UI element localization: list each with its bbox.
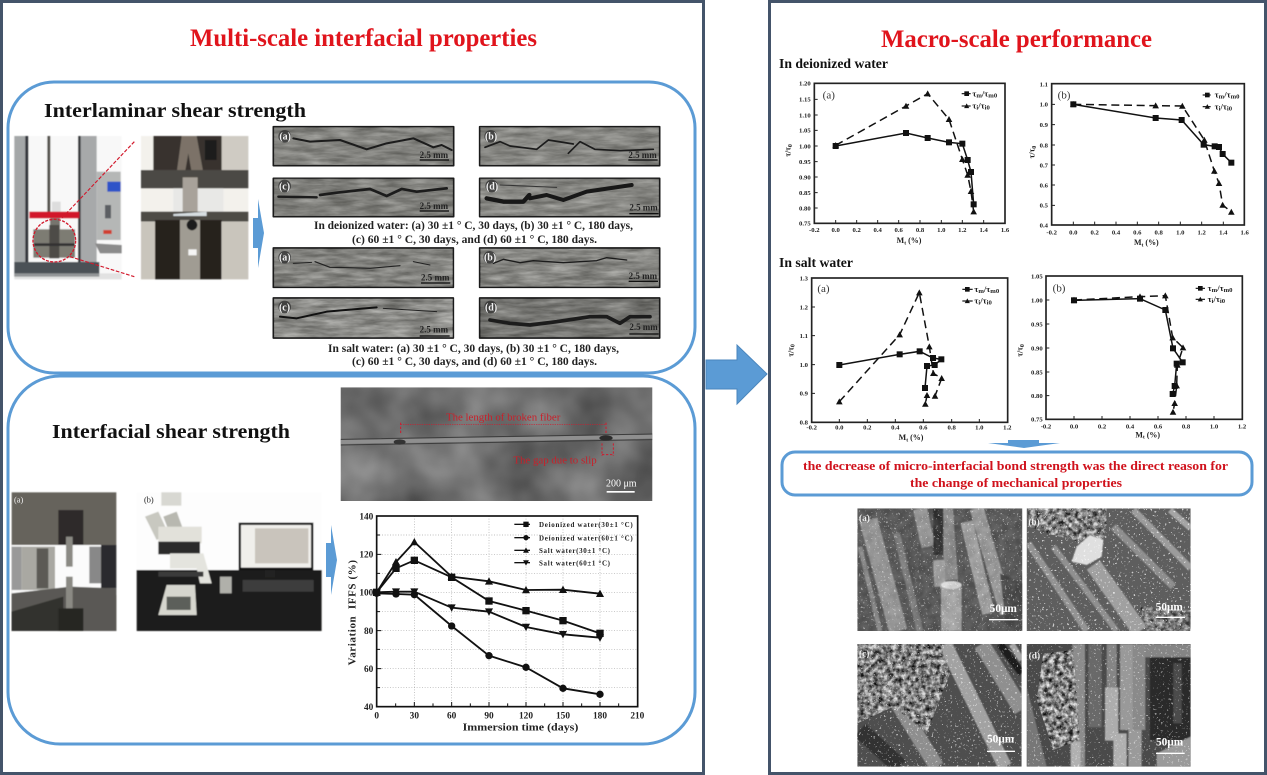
line chart: deionized (b): 0.4 (1112, 229, 1121, 236)
line chart: deionized (b): 0.8 (1040, 142, 1049, 149)
line chart: deionized (a): 0.0 (832, 227, 840, 234)
panel: macro-scale performance (770, 2, 1266, 774)
line chart: deionized (b): τ (1215, 101, 1219, 111)
line chart: deionized (a): 1.10 (799, 112, 811, 119)
line chart: deionized (b): 1.0 (1040, 102, 1049, 109)
panel: interfacial shear strength (8, 376, 695, 744)
heading: in salt water: In salt water (779, 255, 853, 270)
line chart: salt (a) (786, 276, 1012, 443)
SEM image (a) (857, 508, 1022, 631)
axis labels: 150 (556, 712, 570, 722)
line chart: deionized (b): m (1219, 94, 1225, 101)
line chart: deionized (a): 0.85 (799, 190, 811, 197)
axis labels: Variation IFFS (%) (346, 560, 358, 665)
line chart: salt (b): i0 (1220, 298, 1226, 305)
photo: (a) fibre test fixture and (b) microscope: (a) (14, 496, 23, 505)
line chart: deionized (a): 1.4 (980, 227, 988, 234)
title: macro-scale: Macro-scale performance (881, 26, 1152, 53)
line chart: salt (b): t (1143, 435, 1145, 441)
line chart: salt (b): 0.75 (1031, 417, 1043, 424)
legend: Salt water(60±1 °C) (539, 559, 611, 567)
line chart: salt (a): τ/τ (786, 347, 795, 357)
line chart: salt (b): τ/τ (1016, 347, 1025, 357)
line chart: salt (b): 0.90 (1031, 345, 1043, 352)
line chart: salt (b): τ (1208, 283, 1212, 293)
line chart: deionized (a): τ (972, 88, 976, 98)
legend: Salt water(30±1 °C) (539, 547, 611, 555)
line chart: salt (b): m (1212, 287, 1218, 294)
line chart: salt (b): /τ (1216, 283, 1224, 293)
crack image: salt (d) (480, 298, 660, 338)
line chart: salt (a): M (899, 433, 906, 442)
line chart: deionized (b): 0 (1032, 146, 1038, 149)
line chart: salt (b): 0.2 (1098, 423, 1107, 430)
line chart: deionized (a): -0.2 (809, 227, 820, 234)
crack image: deionized (b) (480, 127, 660, 166)
crack image: deionized (b): 2.5 mm (628, 150, 657, 160)
line chart: deionized (a): (%) (906, 236, 922, 245)
micrograph: broken fiber: The gap due to slip (513, 454, 597, 466)
line chart: deionized (a): τ/τ (784, 147, 793, 157)
axis labels: 30 (410, 712, 419, 722)
axis labels: 210 (630, 712, 645, 722)
line chart: salt (b): 1.0 (1210, 423, 1219, 430)
crack image: salt (d): (d) (485, 302, 497, 313)
caption: salt water (328, 343, 619, 368)
crack image: salt (d): 2.5 mm (629, 322, 658, 332)
line chart: salt (b): 0.80 (1031, 393, 1043, 400)
line chart: salt (b): 1.2 (1238, 423, 1247, 430)
line chart: salt (b): 1.00 (1031, 297, 1043, 304)
line chart: deionized (a): (a) (823, 89, 835, 101)
line chart: deionized (b): 1.1 (1040, 82, 1048, 89)
line chart: salt (a): 0.9 (800, 391, 809, 398)
crack image: salt (a) (273, 248, 453, 287)
line chart: deionized (a): 0.75 (799, 221, 811, 228)
arrow: central left-to-right (706, 345, 767, 404)
arrow: fixtures to results (326, 525, 337, 595)
line chart: deionized (b): 1.6 (1241, 229, 1249, 236)
crack image: salt (a): 2.5 mm (421, 272, 450, 282)
line chart: salt (a): 1.1 (800, 333, 808, 340)
line chart: deionized (b): 0.9 (1040, 122, 1049, 129)
line chart: deionized (b): 0.5 (1040, 203, 1049, 210)
line chart: salt (b): 0.8 (1182, 423, 1191, 430)
line chart: deionized (a): 0.80 (799, 205, 811, 212)
line chart: deionized (b): 0.0 (1069, 229, 1078, 236)
line chart: deionized (a): m (976, 92, 982, 99)
line chart: salt (b): i (1212, 298, 1214, 305)
line chart: deionized (b): 0.8 (1155, 229, 1163, 236)
line chart: deionized (a): t (904, 240, 906, 246)
line chart: deionized (a): 1.0 (937, 227, 946, 234)
line chart: deionized (a): τ (972, 101, 976, 111)
heading: interlaminar shear strength: Interlaminar shear strength (44, 100, 307, 122)
axis labels: 100 (359, 589, 374, 599)
line chart: salt (a): 0.6 (919, 425, 928, 432)
caption: salt water: (c) 60 ±1 ° C, 30 days, and (d) 60 ±1 ° C, 180 days. (352, 356, 597, 368)
line chart: deionized (a): /τ (977, 101, 985, 111)
line chart: deionized (b) (1028, 82, 1249, 248)
line chart: deionized (a): 0.8 (916, 227, 925, 234)
line chart: deionized (a): 0.6 (895, 227, 903, 234)
line chart: salt (a): /τ (983, 284, 990, 294)
series: salt water 30 (377, 542, 600, 594)
line chart: deionized (b): 0.4 (1040, 223, 1049, 230)
line chart: salt (a): -0.2 (806, 425, 818, 432)
line chart: deionized (b): i0 (1227, 105, 1233, 112)
series: deionized water 30 (377, 560, 600, 633)
line chart: salt (a): i0 (987, 300, 992, 307)
line chart: salt (b): (%) (1145, 430, 1160, 439)
line chart: salt (b): 0.6 (1154, 423, 1163, 430)
caption: salt water: In salt water: (a) 30 ±1 ° C, 30 days, (b) 30 ±1 ° C, 180 days, (328, 343, 619, 355)
line chart: salt (a): (a) (817, 283, 830, 295)
line chart: deionized (b): 0.2 (1091, 229, 1099, 236)
line chart: deionized (a): 1.2 (958, 227, 967, 234)
axis labels: 120 (359, 551, 374, 561)
line chart: salt (a): /τ (979, 296, 987, 306)
line chart: deionized (a) (784, 81, 1010, 246)
line chart: deionized (a): /τ (981, 88, 988, 98)
crack image: deionized (a) (273, 127, 454, 166)
axis labels: 140 (359, 512, 374, 522)
micrograph: broken fiber (341, 387, 652, 501)
line chart: deionized (b): /τ (1223, 90, 1231, 100)
axis labels: 80 (364, 627, 374, 637)
line chart: deionized (a): 1.20 (799, 81, 811, 88)
line chart: deionized (a): i0 (985, 105, 990, 112)
line chart: salt (b): /τ (1213, 294, 1220, 304)
line chart: deionized (a): 1.15 (799, 97, 811, 104)
SEM image (d): (d) (1029, 651, 1040, 662)
line chart: salt (b) (1016, 273, 1247, 441)
SEM image (d) (1026, 644, 1191, 767)
SEM image (a): (a) (859, 513, 870, 524)
crack image: deionized (d): 2.5 mm (629, 203, 658, 213)
line chart: salt (a): 1.0 (975, 425, 984, 432)
line chart: salt (a): 1.3 (800, 276, 809, 283)
photo: (a) fibre test fixture and (b) microscope (12, 492, 322, 631)
line chart: deionized (b): 1.4 (1219, 229, 1228, 236)
line chart: deionized (b): (%) (1143, 238, 1159, 247)
line chart: deionized (a): i (976, 105, 978, 112)
legend: Deionized water(30±1 °C) (539, 521, 633, 529)
line chart: salt (b): M (1135, 430, 1143, 439)
arrow: machine to crack images (253, 199, 264, 268)
line chart: deionized (b): 0.6 (1133, 229, 1142, 236)
SEM image (c): (c) (859, 649, 869, 660)
crack image: salt (c): 2.5 mm (420, 324, 449, 334)
line chart: deionized (b): t (1142, 242, 1144, 248)
line chart: deionized (b): 0.7 (1040, 162, 1049, 169)
line chart: deionized (a): 1.00 (799, 143, 811, 150)
crack image: deionized (c): (c) (279, 181, 290, 192)
SEM image (d): 50μm (1156, 736, 1184, 748)
legend (514, 521, 633, 567)
crack image: deionized (c): 2.5 mm (420, 201, 449, 211)
line chart: salt (a): 1.2 (1003, 425, 1012, 432)
axis labels: 60 (447, 712, 457, 722)
callout: conclusion (782, 452, 1252, 495)
micrograph: broken fiber: 200 μm (606, 479, 637, 490)
crack image: salt (c): (c) (279, 302, 290, 313)
axis labels: Immersion time (days) (463, 721, 579, 733)
axis labels: 60 (364, 665, 374, 675)
crack image: deionized (d) (480, 178, 660, 217)
line chart: salt (b): 0.85 (1031, 369, 1043, 376)
line chart: deionized (b): -0.2 (1046, 229, 1058, 236)
line chart: deionized (a): 1.6 (1001, 227, 1010, 234)
line chart: deionized (a): 0.90 (799, 174, 811, 181)
panel: interlaminar shear strength (8, 82, 695, 373)
SEM images (857, 508, 1191, 767)
line chart: salt (a): 1.2 (800, 304, 809, 311)
micrograph: broken fiber: The length of broken fiber (446, 411, 561, 423)
line chart: deionized (a): 0.2 (853, 227, 861, 234)
crack image: deionized (a): 2.5 mm (420, 150, 449, 160)
axis labels: 40 (364, 703, 374, 713)
line chart: deionized (a): M (897, 236, 904, 245)
line chart: salt (a): 0.2 (863, 425, 872, 432)
line chart: salt (a): 1.0 (800, 362, 809, 369)
caption: deionized water (314, 220, 633, 246)
line chart: variation IFFS vs immersion time (346, 512, 645, 733)
line chart: deionized (a): 0.95 (799, 159, 811, 166)
line chart: deionized (b): m0 (1231, 94, 1240, 101)
SEM image (c): 50μm (987, 734, 1015, 746)
line chart: salt (a): m0 (990, 288, 1000, 295)
line chart: deionized (a): 1.05 (799, 128, 811, 135)
line chart: salt (b): 0.0 (1070, 423, 1079, 430)
caption: deionized water: (c) 60 ±1 ° C, 30 days, and (d) 60 ±1 ° C, 180 days. (352, 234, 597, 246)
line chart: deionized (a): 0.4 (874, 227, 882, 234)
line chart: deionized (b): τ/τ (1028, 149, 1037, 158)
series: salt water 60 (377, 592, 600, 638)
line chart: salt (a): i (978, 300, 980, 307)
SEM image (b) (1026, 508, 1191, 631)
line chart: deionized (b): /τ (1220, 101, 1227, 111)
line chart: salt (a): 0.0 (835, 425, 844, 432)
photo: (a) fibre test fixture and (b) microscope: (b) (144, 495, 154, 504)
heading: in deionized water: In deionized water (779, 56, 888, 71)
line chart: salt (a): 0.8 (948, 425, 956, 432)
line chart: salt (a): τ (974, 296, 978, 306)
axis labels: 120 (519, 712, 533, 722)
callout: conclusion: the decrease of micro-interfacial bond strength was the direct reason for (803, 458, 1228, 473)
line chart: salt (b): 0.4 (1126, 423, 1135, 430)
crack image: salt (b) (480, 248, 660, 287)
line chart: salt (a): 0.8 (800, 419, 809, 426)
line chart: salt (b): 1.05 (1031, 273, 1043, 280)
line chart: deionized (b): 1.0 (1176, 229, 1185, 236)
series: deionized water 60 (377, 593, 600, 694)
arrow: down to conclusion (988, 440, 1060, 448)
crack image: deionized (d): (d) (486, 181, 498, 192)
axis labels: 90 (484, 712, 494, 722)
line chart: salt (a): 0 (791, 344, 797, 347)
photo: testing machine with zoomed fixture (14, 136, 248, 279)
axis labels: 0 (374, 712, 379, 722)
crack image: deionized (b): (b) (485, 132, 497, 143)
crack images: deionized and salt water (273, 127, 660, 338)
crack image: salt (c) (273, 298, 453, 338)
axis labels (346, 512, 645, 733)
crack image: salt (b): 2.5 mm (629, 271, 658, 281)
callout: conclusion: the change of mechanical properties (910, 475, 1122, 490)
line chart: deionized (b): 1.2 (1198, 229, 1206, 236)
line chart: deionized (b): τ (1215, 90, 1219, 100)
line chart: salt (b): -0.2 (1041, 423, 1052, 430)
caption: deionized water: In deionized water: (a) 30 ±1 ° C, 30 days, (b) 30 ±1 ° C, 180 days, (314, 220, 633, 232)
title: multi-scale: Multi-scale interfacial properties (190, 25, 537, 52)
line chart: salt (a): (%) (908, 433, 924, 442)
crack image: deionized (c) (273, 178, 454, 217)
axis labels: 180 (593, 712, 607, 722)
line chart: salt (a): t (906, 437, 908, 443)
line chart: deionized (a): m0 (988, 92, 998, 99)
line chart: salt (b): 0.95 (1031, 321, 1043, 328)
line chart: salt (a): 0.4 (891, 425, 900, 432)
crack image: deionized (a): (a) (279, 132, 291, 143)
heading: interfacial shear strength: Interfacial shear strength (52, 421, 291, 443)
line chart: salt (a): m (978, 288, 984, 295)
crack image: salt (b): (b) (484, 253, 496, 264)
line chart: salt (b): τ (1208, 294, 1212, 304)
line chart: salt (b): (b) (1053, 282, 1066, 294)
SEM image (b): (b) (1028, 517, 1040, 528)
panel: multi-scale interfacial properties (2, 2, 704, 774)
line chart: salt (a): τ (974, 284, 978, 294)
legend: Deionized water(60±1 °C) (539, 534, 633, 542)
crack image: salt (a): (a) (279, 253, 291, 264)
line chart: deionized (b): 0.6 (1040, 182, 1049, 189)
line chart: deionized (b): M (1134, 238, 1142, 247)
line chart: deionized (a): 0 (788, 144, 794, 147)
SEM image (a): 50μm (990, 603, 1017, 615)
line chart: salt (b): m0 (1224, 287, 1233, 294)
line chart: salt (b): 0 (1020, 344, 1026, 347)
SEM image (c) (857, 644, 1022, 767)
SEM image (b): 50μm (1156, 602, 1183, 614)
line chart: deionized (b): i (1219, 105, 1221, 112)
line chart: deionized (b): (b) (1058, 89, 1071, 101)
